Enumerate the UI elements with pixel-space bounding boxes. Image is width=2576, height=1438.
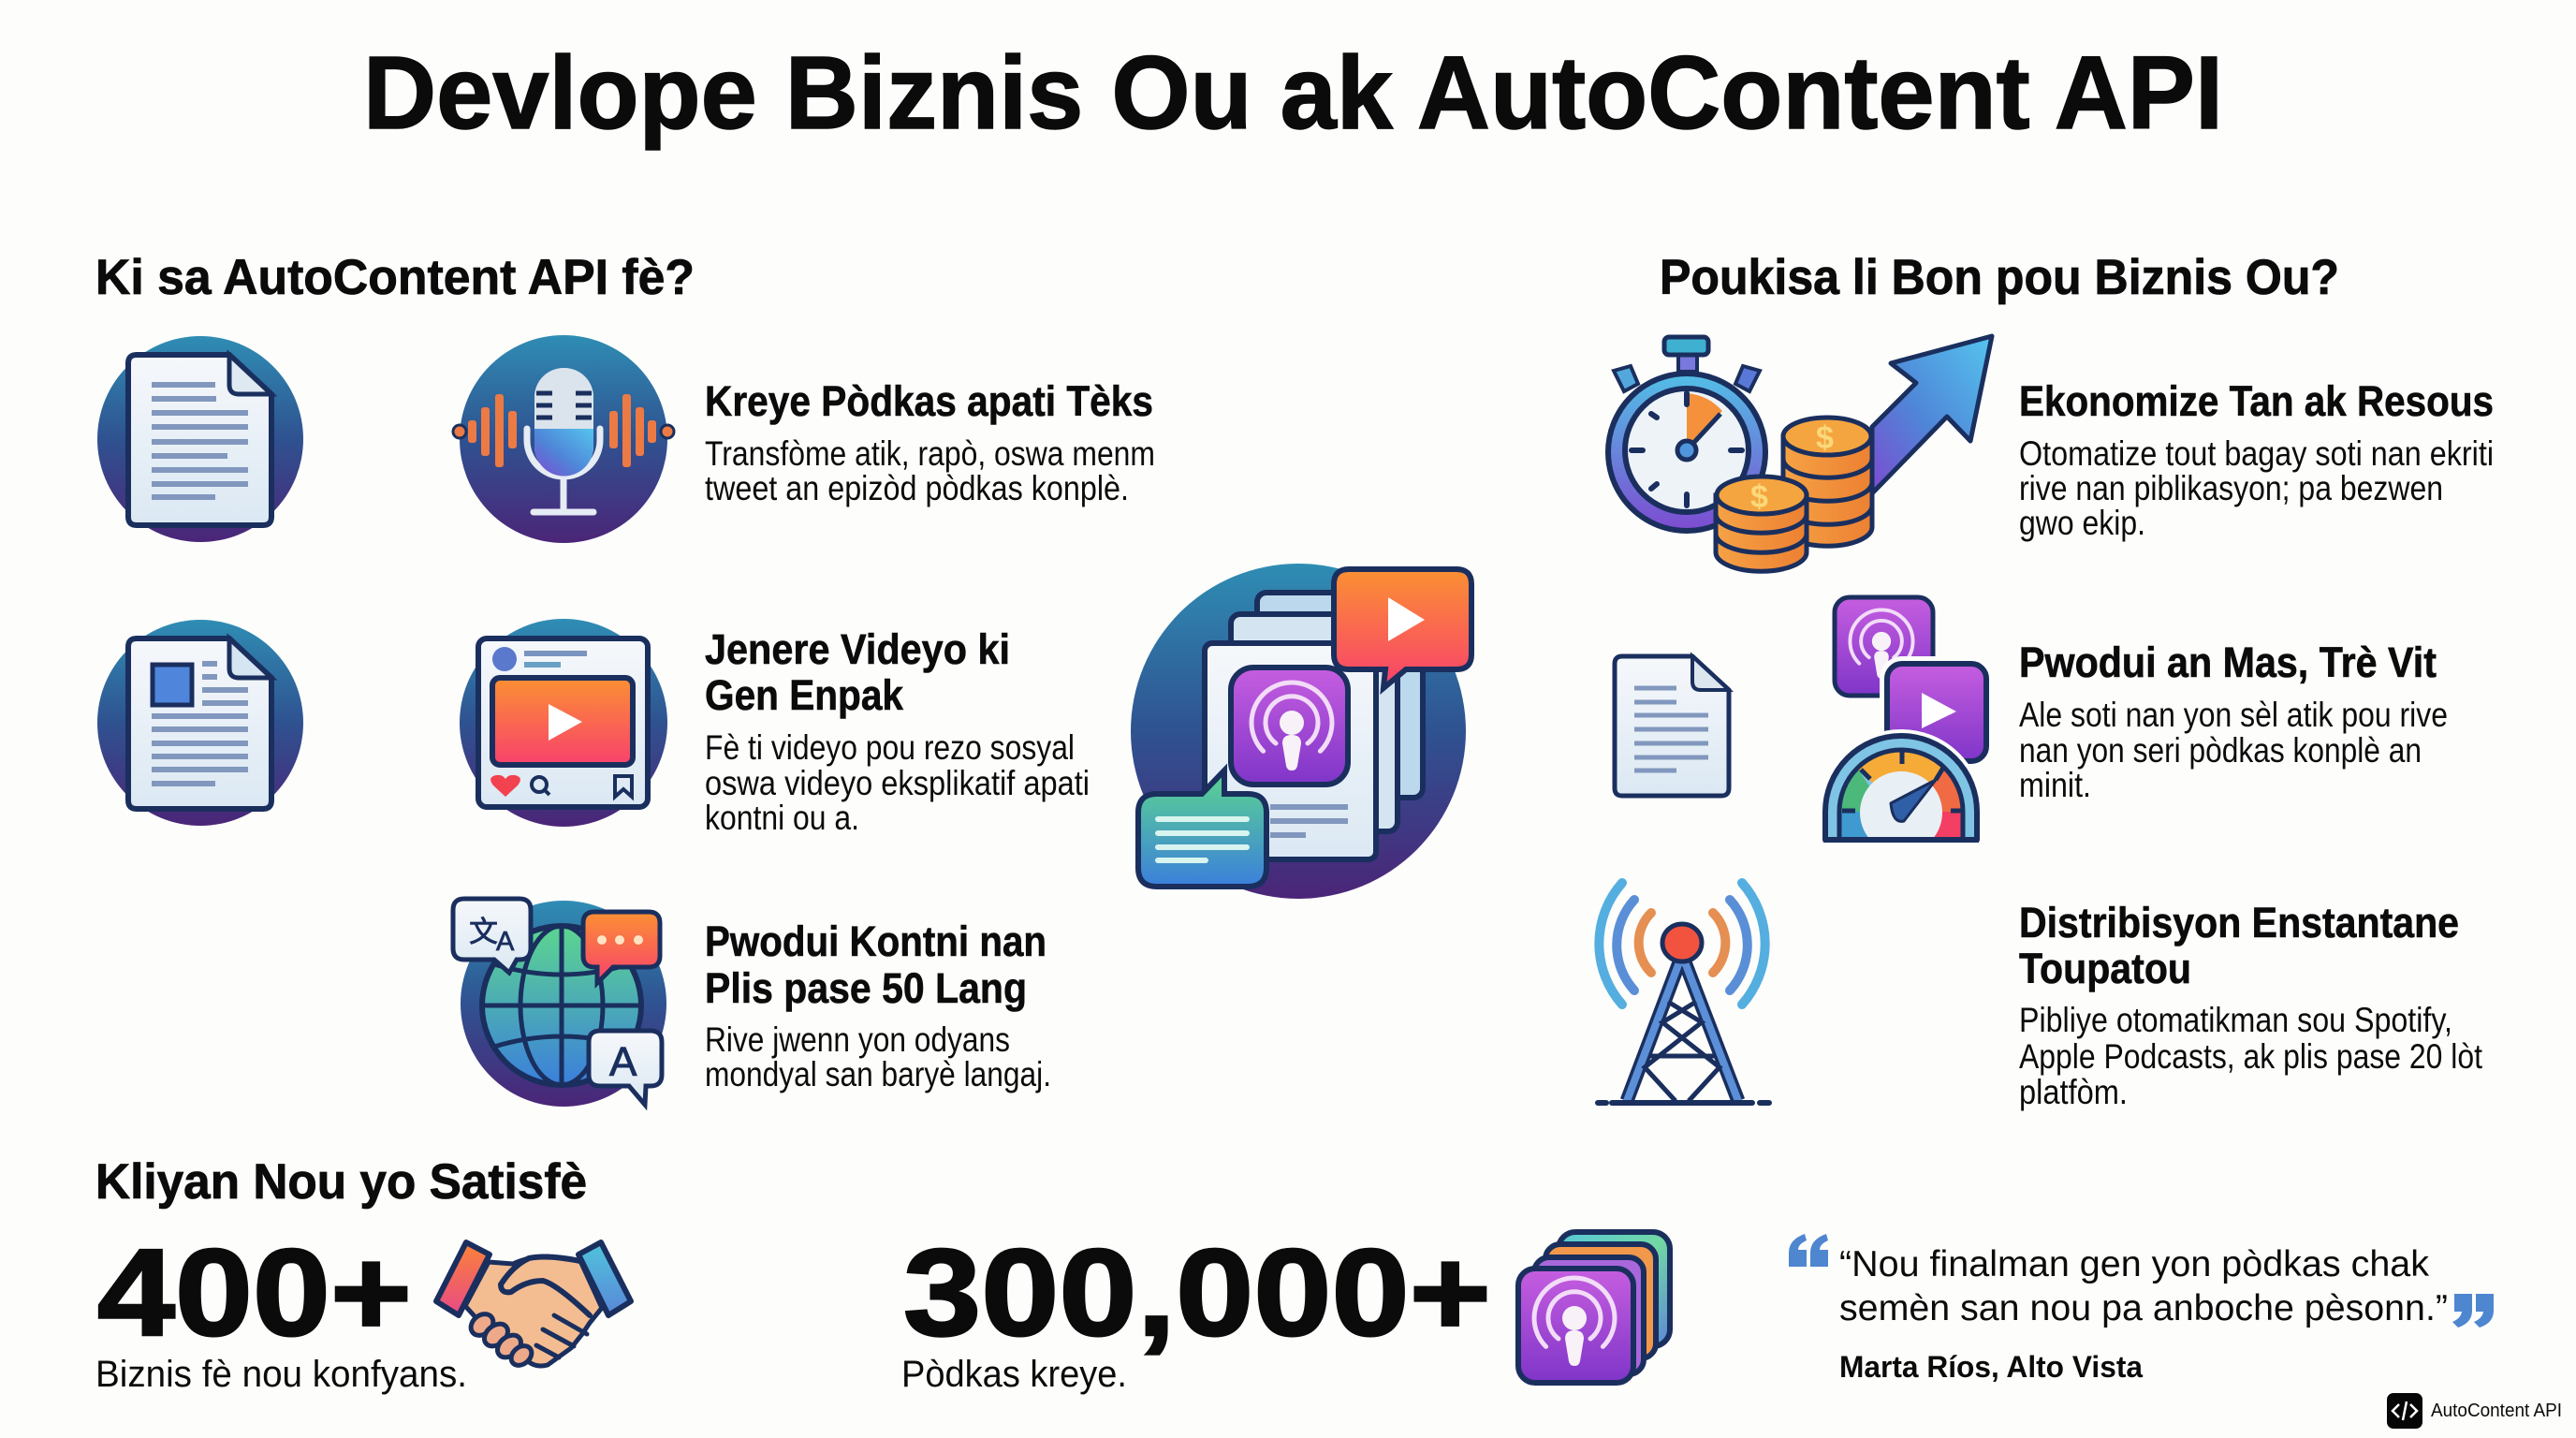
icon: globe with translation bubbles: 文 xyxy=(469,916,498,948)
feature: video: Gen Enpak xyxy=(705,671,904,719)
feature: languages: Rive jwenn yon odyans xyxy=(705,1020,1010,1059)
feature: save time and resources: Ekonomize Tan ak Resous xyxy=(2019,377,2494,425)
feature: languages: Pwodui Kontni nan xyxy=(705,917,1046,965)
feature: video: kontni ou a. xyxy=(705,799,859,837)
testimonial quote: “Nou finalman gen yon pòdkas chak xyxy=(1839,1244,2429,1284)
stat: podcasts: Pòdkas kreye. xyxy=(901,1354,1127,1395)
feature: languages: mondyal san baryè langaj. xyxy=(705,1055,1051,1093)
feature: instant distribution: Apple Podcasts, ak plis pase 20 lòt xyxy=(2019,1037,2483,1076)
feature: podcast from text: Kreye Pòdkas apati Tèks xyxy=(705,377,1153,425)
feature: instant distribution: Distribisyon Enstantane xyxy=(2019,899,2459,946)
feature: video: Fè ti videyo pou rezo sosyal xyxy=(705,728,1075,767)
icon: podcast, video and speed gauge xyxy=(1823,597,1986,840)
icon: central content hub xyxy=(1131,564,1471,899)
feature: mass production: Ale soti nan yon sèl atik pou rive xyxy=(2019,696,2448,734)
feature: instant distribution: platfòm. xyxy=(2019,1073,2128,1111)
title: Devlope Biznis Ou ak AutoContent API xyxy=(363,36,2223,151)
feature: save time and resources: Otomatize tout bagay soti nan ekriti xyxy=(2019,434,2494,473)
icon: globe with translation bubbles xyxy=(453,899,666,1107)
heading: satisfied customers: Kliyan Nou yo Satisfè xyxy=(95,1154,587,1210)
icon: source document xyxy=(1615,656,1729,796)
icon: document with image xyxy=(97,620,303,826)
stat: businesses: 400+ xyxy=(97,1224,412,1361)
icon: broadcast tower xyxy=(1598,883,1769,1103)
feature: save time and resources xyxy=(2019,377,2494,542)
feature: video: Jenere Videyo ki xyxy=(705,625,1010,673)
icon: handshake xyxy=(436,1242,631,1370)
logo: AutoContent API badge xyxy=(2387,1393,2562,1429)
icon: stopwatch, coins and growth arrow xyxy=(1608,336,1992,571)
icon: stopwatch, coins and growth arrow: $ xyxy=(1750,479,1768,515)
feature: instant distribution: Toupatou xyxy=(2019,945,2191,992)
icon: stacked podcast cards xyxy=(1518,1232,1670,1383)
heading: why it is good for business: Poukisa li Bon pou Biznis Ou? xyxy=(1660,250,2339,305)
icon: globe with translation bubbles: A xyxy=(496,927,515,957)
feature: mass production: Pwodui an Mas, Trè Vit xyxy=(2019,638,2437,686)
testimonial quote: semèn san nou pa anboche pèsonn.” xyxy=(1839,1288,2448,1328)
feature: mass production: minit. xyxy=(2019,766,2091,804)
logo: AutoContent API badge: AutoContent API xyxy=(2431,1401,2562,1421)
feature: languages xyxy=(705,917,1051,1093)
feature: instant distribution: Pibliye otomatikman sou Spotify, xyxy=(2019,1001,2452,1039)
feature: podcast from text xyxy=(705,377,1155,507)
feature: podcast from text: tweet an epizòd pòdkas konplè. xyxy=(705,469,1129,507)
feature: mass production: nan yon seri pòdkas konplè an xyxy=(2019,731,2422,770)
icon: social video card xyxy=(460,619,667,827)
feature: instant distribution xyxy=(2019,899,2483,1111)
feature: mass production xyxy=(2019,638,2448,804)
icon: microphone with sound waves xyxy=(453,335,674,543)
testimonial quote xyxy=(1789,1234,2494,1384)
icon: stopwatch, coins and growth arrow: $ xyxy=(1816,420,1834,456)
feature: languages: Plis pase 50 Lang xyxy=(705,964,1027,1012)
feature: video xyxy=(705,625,1090,837)
stat: podcasts: 300,000+ xyxy=(903,1224,1491,1361)
feature: save time and resources: gwo ekip. xyxy=(2019,504,2145,542)
icon: text document xyxy=(97,336,303,542)
stat: businesses: Biznis fè nou konfyans. xyxy=(95,1354,467,1395)
feature: podcast from text: Transfòme atik, rapò, oswa menm xyxy=(705,434,1155,473)
icon: globe with translation bubbles: A xyxy=(609,1039,637,1085)
feature: video: oswa videyo eksplikatif apati xyxy=(705,764,1090,802)
stat: businesses xyxy=(95,1224,467,1395)
feature: save time and resources: rive nan piblikasyon; pa bezwen xyxy=(2019,469,2443,507)
heading: what the API does: Ki sa AutoContent API fè? xyxy=(95,250,695,305)
testimonial quote: Marta Ríos, Alto Vista xyxy=(1839,1350,2143,1384)
